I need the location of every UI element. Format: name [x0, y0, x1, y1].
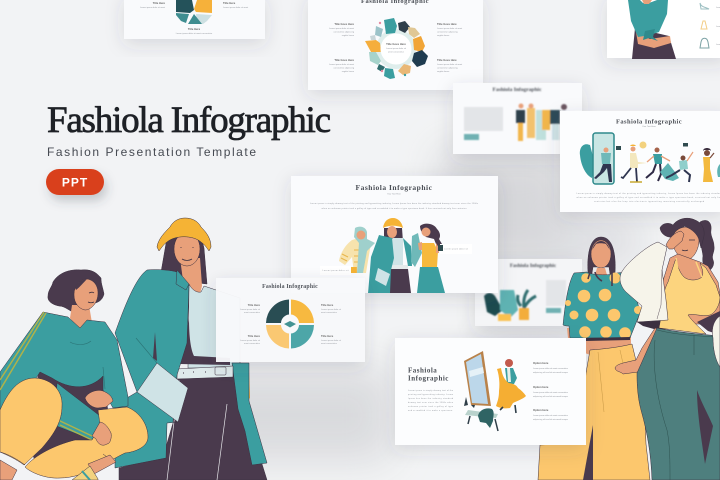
slide: right phone scene [560, 111, 720, 212]
skateboard girl [621, 142, 647, 182]
figure: woman with yellow hat [115, 218, 267, 480]
left option text: sagittis lorem [342, 34, 354, 37]
face [673, 227, 699, 260]
left labels: Title Here [248, 303, 261, 307]
jacket right flap [232, 363, 267, 465]
ankle right [88, 455, 116, 474]
left labels: amet consectetur [244, 342, 260, 345]
ponytail hair [699, 220, 714, 271]
slide subtitle: Your Text Here [642, 125, 657, 128]
jacket cuff [137, 363, 188, 422]
left option text: consectetur adipiscing [333, 30, 355, 34]
yellow thigh [0, 378, 62, 465]
raised arm [615, 328, 664, 374]
standing mirror [464, 351, 491, 406]
yellow dress woman [703, 148, 720, 182]
subtitle: Fashion Presentation Template [47, 145, 256, 159]
slide heading: Infographic [408, 374, 449, 382]
ring centre text: amet consectetur [388, 50, 404, 54]
slide body text: unknown printer took a galley of type [408, 405, 454, 408]
slide: top clothes ring [308, 0, 483, 90]
slide heading: Fashiola Infographic [616, 118, 682, 126]
phone and runner [580, 133, 621, 184]
right option text: Title Goes Here [437, 58, 457, 62]
slide: blurred team preview [453, 83, 582, 154]
bucket hat [157, 218, 211, 251]
hair strands on top [588, 272, 612, 286]
face [74, 279, 98, 310]
main title: Fashiola Infographic [47, 100, 331, 141]
jacket fold shadow [153, 332, 157, 361]
slide body text: dummy text ever since the 1500s when [408, 401, 454, 404]
collar [176, 270, 189, 290]
right labels: amet consectetur [321, 342, 337, 345]
white jacket right [712, 316, 720, 367]
dark gap between legs [697, 390, 713, 464]
callout right [438, 244, 472, 254]
right option text: sagittis lorem [437, 70, 450, 73]
side labels: Title Here [188, 27, 201, 31]
hand lower [92, 422, 111, 445]
slide caption [576, 192, 720, 203]
blurred plant contents: Fashiola Infographic [510, 263, 557, 269]
bench and coat [465, 405, 498, 431]
slide: donut chart preview [216, 278, 365, 362]
octagon chart [176, 0, 212, 24]
side labels: Lorem ipsum dolor sit amet [223, 6, 248, 9]
jacket main [115, 270, 189, 468]
hair back [48, 270, 104, 314]
tank strap [676, 258, 702, 277]
face [174, 232, 200, 266]
right labels: Title Here [321, 334, 334, 338]
slide body text [310, 202, 478, 210]
left option text: Lorem ipsum dolor sit amet [329, 63, 354, 66]
slide caption: Lorem ipsum is simply dummy text of the printing and typesetting industry, Lorem Ipsum has been the industry standard [576, 192, 720, 195]
slide body text: Lorem ipsum is simply dummy text of the printing and typesetting industry, Lorem Ipsum has been the industry standard dummy text ever since the 1500s [310, 202, 478, 205]
left option text [329, 22, 355, 73]
right option text: consectetur adipiscing [437, 66, 458, 70]
accessory icons [700, 3, 709, 48]
sock right [72, 466, 98, 480]
ring centre text [386, 42, 406, 54]
slide: blurred plant preview [475, 259, 582, 326]
waist band [585, 337, 630, 341]
ring centre text: Title Goes Here [386, 42, 406, 46]
right labels: Title Here [321, 303, 334, 307]
yellow lining [242, 370, 250, 401]
slide: mirror and dress [395, 338, 586, 445]
blurred team contents: Fashiola Infographic [492, 87, 542, 93]
slide caption: centuries but also the leap into electronic typesetting remaining essentially unchanged [594, 200, 705, 203]
option list: adipiscing elit sed do eiusmod tempor [533, 371, 568, 374]
lunging man and leaf [660, 143, 693, 182]
trousers [119, 371, 267, 480]
dark inner [26, 365, 108, 465]
left labels: Title Here [248, 334, 261, 338]
side labels [140, 1, 248, 35]
option list: Lorem ipsum dolor sit amet consectetur [533, 367, 568, 370]
hand to glasses [666, 231, 684, 249]
dark back [697, 311, 720, 335]
right option text: Title Goes Here [437, 22, 457, 26]
yellow leg [25, 407, 148, 478]
ponytail woman [411, 224, 445, 293]
left labels [240, 303, 261, 345]
bun and fringe [660, 218, 704, 248]
figure: woman in polka top [538, 237, 650, 480]
right option text: consectetur adipiscing [437, 30, 458, 34]
neck [180, 258, 202, 296]
green trousers [637, 328, 720, 480]
slide body text: Ipsum has been the industry standard [408, 397, 454, 400]
side labels: Lorem ipsum dolor sit amet consectetur [176, 32, 212, 35]
belly [585, 335, 631, 355]
yellow tank [659, 258, 720, 334]
left option text: sagittis lorem [342, 70, 354, 73]
sweater [0, 312, 128, 425]
right option text: Lorem ipsum dolor sit amet [437, 63, 462, 66]
side labels: Lorem ipsum dolor sit amet [140, 6, 165, 9]
hair [588, 237, 615, 281]
woman torso [628, 0, 676, 59]
side labels: Title Here [223, 1, 236, 5]
polka top [563, 272, 640, 338]
left labels: amet consectetur [244, 311, 260, 314]
torso skin [660, 254, 720, 324]
callout left [320, 266, 356, 275]
slide: top-right woman and accessories [607, 0, 720, 59]
left option text: Title Goes Here [334, 22, 354, 26]
accessory text [716, 6, 720, 46]
right labels: amet consectetur [321, 311, 337, 314]
left option text: Title Goes Here [334, 58, 354, 62]
option list: Option Here [533, 361, 549, 365]
soft background shading [190, 150, 640, 460]
slide heading: Fashiola Infographic [356, 183, 433, 192]
slide body text: and scrambled it to make a specimen. [408, 409, 453, 412]
callout left: Lorem ipsum dolor sit [322, 269, 349, 272]
dark slit [583, 425, 593, 480]
face [591, 240, 611, 268]
left option text: Lorem ipsum dolor sit amet [329, 27, 354, 30]
figure: seated woman [0, 270, 148, 480]
hair [160, 232, 207, 284]
donut chart [266, 300, 314, 348]
slide: centre trio [291, 176, 498, 293]
hand upper [85, 390, 113, 408]
slide: top-left donut preview [124, 0, 265, 39]
teal jacket woman [368, 218, 412, 293]
left labels: Lorem ipsum dolor sit [240, 308, 260, 311]
figure: woman in yellow tank [615, 218, 720, 480]
option list: adipiscing elit sed do eiusmod tempor [533, 418, 568, 421]
polka dots [565, 272, 642, 339]
side labels: Title Here [153, 1, 166, 5]
option list [533, 361, 568, 421]
dark under sleeve [637, 320, 667, 332]
slide heading: Fashiola [408, 366, 437, 374]
neck [70, 305, 92, 332]
right labels [321, 303, 341, 345]
option list: adipiscing elit sed do eiusmod tempor [533, 395, 568, 398]
belt [177, 366, 233, 379]
right option text: Lorem ipsum dolor sit amet [437, 27, 462, 30]
slide heading: Fashiola Infographic [262, 284, 318, 290]
slide body text: printing and typesetting industry. Lorem [408, 393, 453, 396]
PPT badge: PPT [62, 176, 88, 190]
left labels: Lorem ipsum dolor sit [240, 339, 260, 342]
white jacket sleeve [620, 242, 668, 322]
sleeve [54, 383, 104, 440]
left arm [567, 328, 575, 338]
option list: Option Here [533, 385, 549, 389]
option list: Option Here [533, 408, 549, 412]
hijab woman [339, 227, 375, 273]
option list: Lorem ipsum dolor sit amet consectetur [533, 414, 568, 417]
ring centre text: Lorem ipsum dolor sit [386, 47, 406, 50]
walking man [646, 148, 670, 181]
clothes ring [365, 18, 428, 79]
right option text: sagittis lorem [437, 34, 450, 37]
slide body text: when an unknown printer took a galley of type and scrambled it to make a type specimen book. It has survived not only five centuries [322, 207, 466, 210]
shirt [188, 284, 240, 368]
callout right: Lorem ipsum dolor sit [444, 248, 468, 250]
option list: Lorem ipsum dolor sit amet consectetur [533, 391, 568, 394]
PPT badge [46, 169, 104, 195]
slide subtitle: Your Text Here [387, 192, 402, 196]
left option text: consectetur adipiscing [333, 66, 355, 70]
slide body text: Lorem ipsum is simply dummy text of the [408, 389, 454, 392]
ankle cuffs [0, 452, 115, 465]
ankle left [0, 460, 17, 480]
shoulder stripes [0, 312, 46, 390]
undershirt [180, 318, 230, 365]
yellow trousers [538, 344, 650, 480]
right labels: Lorem ipsum dolor sit [321, 339, 341, 342]
slide body text [408, 389, 454, 412]
slide caption: when an unknown printer took a galley of type and scrambled it to make a type specimen book, survived not only five [576, 196, 720, 199]
right option text [437, 22, 462, 73]
woman with yellow dress [496, 359, 526, 413]
right labels: Lorem ipsum dolor sit [321, 308, 341, 311]
